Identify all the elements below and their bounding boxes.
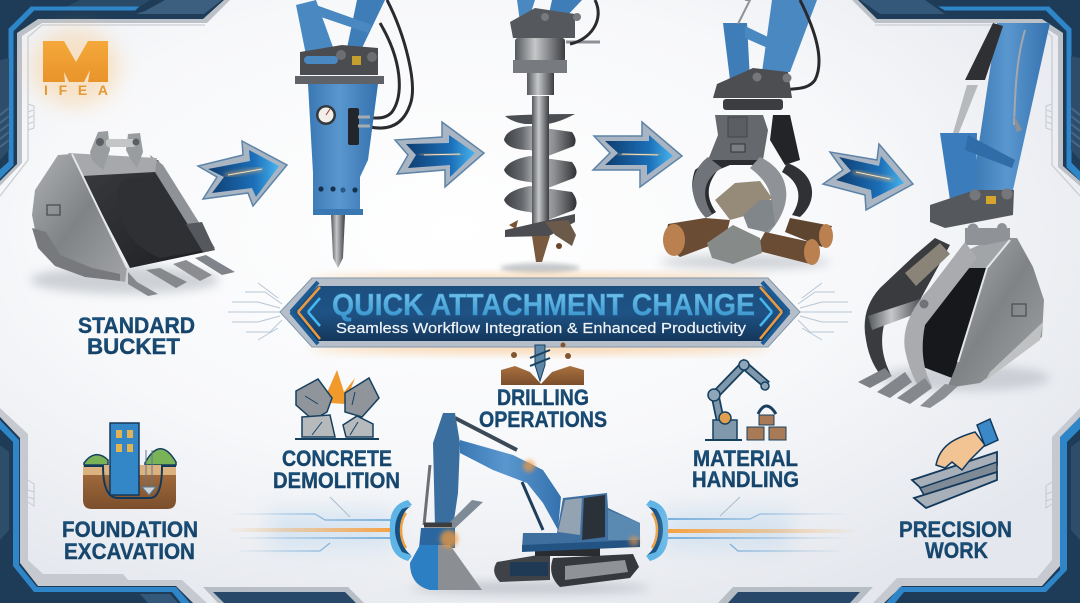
glow lines: left of excavator: [225, 497, 395, 551]
label: precision work: WORK: [925, 538, 988, 563]
label: drilling operations: [479, 385, 607, 432]
excavator: [410, 413, 650, 594]
arrow 2: [395, 122, 484, 187]
logo: MIFEA: IFEA: [44, 82, 108, 98]
label: foundation excavation: EXCAVATION: [64, 539, 195, 564]
label: concrete demolition: CONCRETE: [282, 446, 392, 471]
bracket: right of excavator: [646, 500, 668, 561]
icon: material handling: [705, 360, 786, 440]
arrow 1: [198, 141, 287, 206]
attachment: grapple with logs and rocks: [660, 0, 833, 269]
attachment: standard bucket: [30, 131, 235, 296]
icon: drilling: [501, 342, 584, 385]
arrow 4: [823, 144, 913, 210]
frame: bottom-left corner: [0, 408, 364, 603]
label: foundation excavation: FOUNDATION: [62, 517, 198, 542]
label: precision work: [899, 517, 1012, 563]
label: concrete demolition: [273, 446, 400, 493]
icon: concrete demolition: [295, 370, 379, 439]
frame: bottom-right corner: [718, 408, 1080, 603]
bracket: left of excavator: [390, 500, 412, 561]
label: precision work: PRECISION: [899, 517, 1012, 542]
banner subtitle text: Seamless Workflow Integration & Enhanced Productivity: [336, 320, 747, 337]
label: standard bucket: [78, 313, 195, 359]
title banner: [228, 275, 852, 353]
frame: top-right corner: [852, 0, 1080, 196]
attachment: earth auger: [500, 0, 600, 273]
label: standard bucket: BUCKET: [87, 334, 181, 359]
attachment: grab bucket with thumb: [858, 23, 1050, 408]
arrow 3: [593, 122, 682, 187]
glow lines: right of excavator: [665, 497, 860, 551]
icon: precision work: [912, 419, 998, 508]
frame: top-left corner: [0, 0, 230, 196]
label: material handling: HANDLING: [692, 467, 799, 492]
banner title text: QUICK ATTACHMENT CHANGE: [332, 287, 755, 322]
banner circuit traces: left: [228, 283, 282, 340]
label: material handling: [692, 446, 799, 492]
label: material handling: MATERIAL: [693, 446, 798, 471]
label: foundation excavation: [62, 517, 198, 564]
label: drilling operations: DRILLING: [497, 385, 589, 410]
label: drilling operations: OPERATIONS: [479, 407, 607, 432]
attachment: hydraulic breaker: [295, 0, 412, 268]
icon: foundation excavation: [83, 423, 176, 509]
label: standard bucket: STANDARD: [78, 313, 195, 338]
banner circuit traces: right: [798, 283, 852, 340]
label: concrete demolition: DEMOLITION: [273, 468, 400, 493]
logo: MIFEA: [32, 30, 120, 106]
